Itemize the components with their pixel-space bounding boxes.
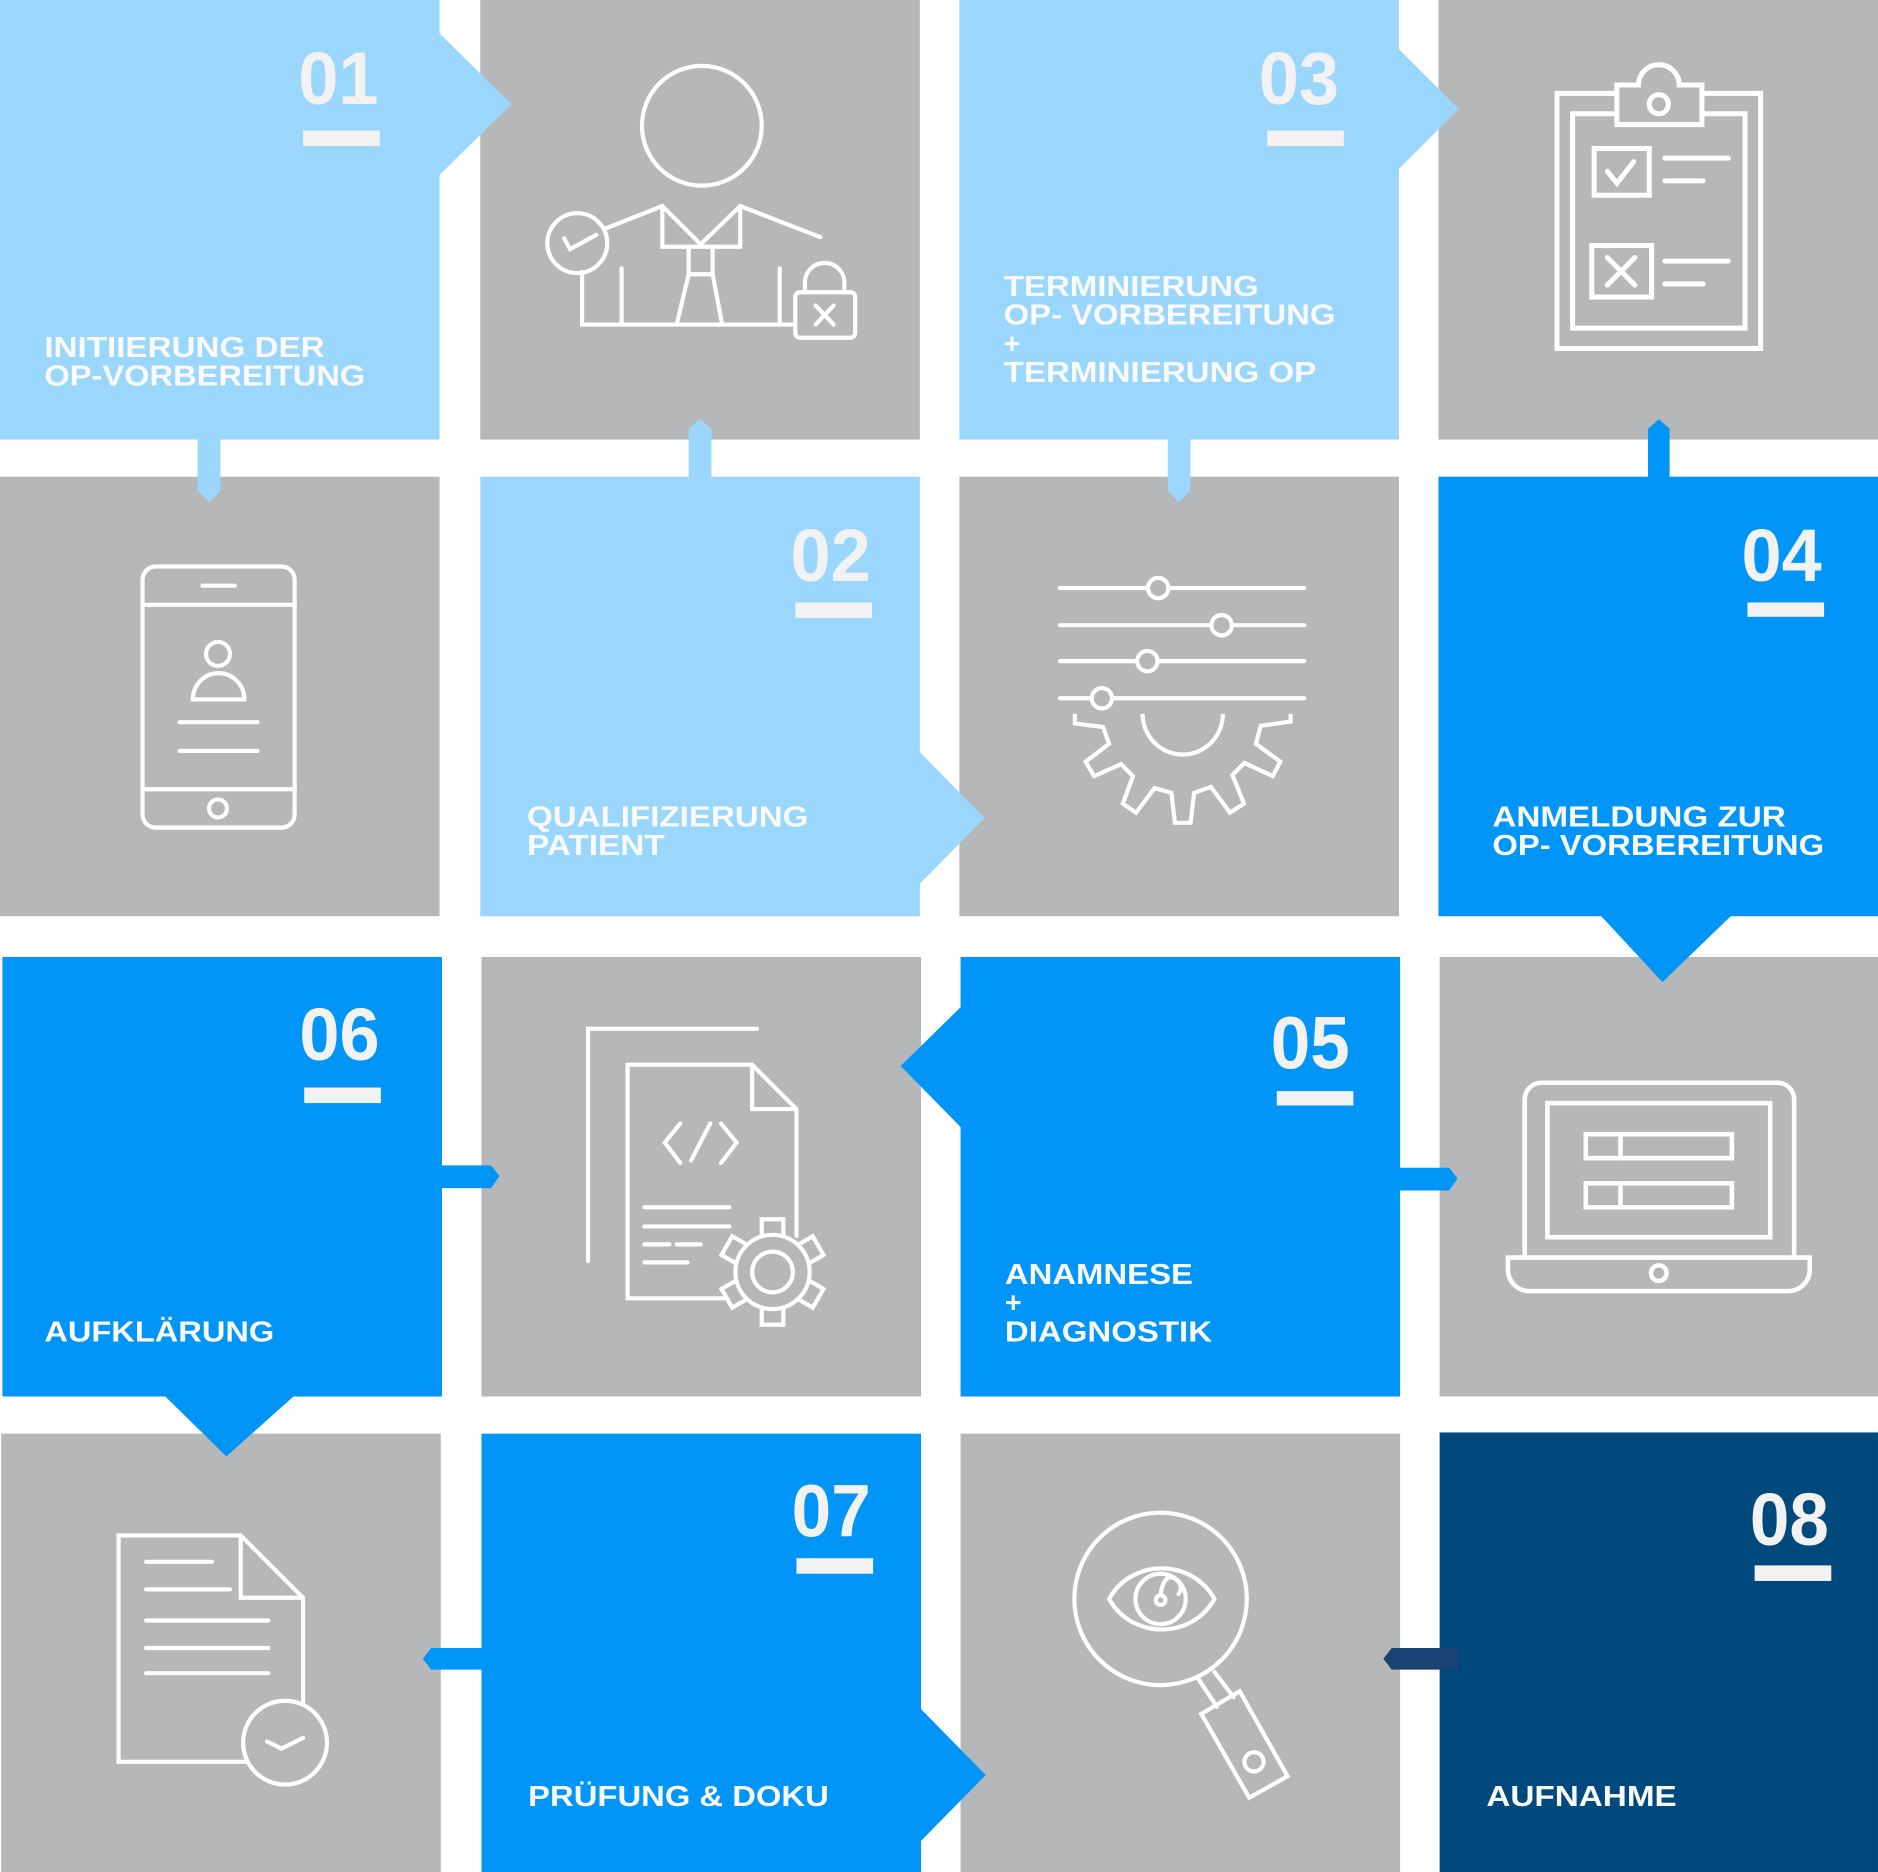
label 03: + xyxy=(1004,328,1020,360)
number 05: 05 xyxy=(1271,1001,1350,1084)
bar 04 xyxy=(1747,602,1824,617)
panel: icon clipboard xyxy=(1438,0,1878,440)
number 03: 03 xyxy=(1259,37,1339,120)
label 07: PRÜFUNG & DOKU xyxy=(528,1780,829,1813)
connector: step 04 up xyxy=(1648,419,1670,478)
panel: icon document with check xyxy=(1,1434,441,1872)
bar 07 xyxy=(796,1558,873,1574)
icon: magnifier with eye xyxy=(1074,1513,1288,1798)
label 03: TERMINIERUNG OP xyxy=(1004,357,1316,389)
label 04: OP- VORBEREITUNG xyxy=(1492,830,1824,862)
panel: icon magnifier with eye xyxy=(961,1434,1400,1872)
number 01: 01 xyxy=(298,37,378,120)
number 02: 02 xyxy=(790,514,871,597)
icon: sliders and gear xyxy=(1060,578,1304,823)
icon: laptop xyxy=(1508,1083,1810,1291)
icon: document with check xyxy=(119,1535,327,1785)
label 04: ANMELDUNG ZUR xyxy=(1492,801,1786,833)
label 01: OP-VORBEREITUNG xyxy=(44,361,365,393)
label 02: QUALIFIZIERUNG xyxy=(527,801,808,833)
icon: smartphone xyxy=(143,567,295,828)
panel: step 07 xyxy=(423,1434,986,1872)
arrow: step 01 to 02 xyxy=(438,32,511,176)
panel: step 03 xyxy=(959,0,1459,502)
arrow: step 07 to 08 xyxy=(920,1708,986,1842)
label 04 xyxy=(1492,801,1824,862)
label 06: AUFKLÄRUNG xyxy=(44,1315,274,1348)
label 02 xyxy=(527,801,808,862)
arrow: step 04 to 05 xyxy=(1600,915,1732,982)
panel: step 05 xyxy=(901,957,1458,1397)
bar 01 xyxy=(303,131,380,146)
panel: step 01 xyxy=(0,0,511,502)
bar 03 xyxy=(1267,131,1344,146)
connector: step 06 right xyxy=(441,1165,499,1188)
connector: step 03 down xyxy=(1168,438,1191,502)
panel: step 02 xyxy=(480,419,985,916)
label 03 xyxy=(1004,271,1335,389)
icon: person xyxy=(547,66,855,338)
panel: step 08 xyxy=(1383,1432,1878,1872)
panel: icon smartphone xyxy=(0,477,440,916)
connector: step 02 up xyxy=(689,419,711,478)
arrow: step 06 to 07 xyxy=(164,1395,295,1456)
label 08: AUFNAHME xyxy=(1486,1781,1677,1813)
connector: step 01 down xyxy=(198,438,220,502)
label 01: INITIIERUNG DER xyxy=(44,332,325,364)
panel: icon laptop xyxy=(1440,957,1878,1397)
label 02: PATIENT xyxy=(527,830,665,862)
label 05: DIAGNOSTIK xyxy=(1005,1316,1212,1348)
bar 05 xyxy=(1277,1091,1353,1105)
number 06: 06 xyxy=(299,993,380,1076)
arrow: step 03 to 04 xyxy=(1398,48,1459,170)
label 03: TERMINIERUNG xyxy=(1004,271,1259,303)
label 03: OP- VORBEREITUNG xyxy=(1004,300,1335,332)
connector: step 08 left xyxy=(1383,1648,1458,1670)
arrow: step 05 to 06 xyxy=(901,1006,962,1128)
number 07: 07 xyxy=(792,1470,871,1553)
panel: step 06 xyxy=(2,957,499,1456)
bar 08 xyxy=(1755,1565,1831,1581)
label 05: + xyxy=(1005,1288,1022,1320)
connector: step 05 right xyxy=(1399,1168,1458,1191)
panel: icon sliders and gear xyxy=(959,477,1399,916)
icon: clipboard xyxy=(1557,65,1761,349)
connector: step 07 left xyxy=(423,1648,483,1670)
panel: icon code document with gear xyxy=(481,957,921,1397)
icon: code document xyxy=(588,1029,824,1325)
number 08: 08 xyxy=(1750,1478,1829,1561)
label 05: ANAMNESE xyxy=(1005,1259,1193,1291)
panel: step 04 xyxy=(1438,419,1878,982)
number 04: 04 xyxy=(1741,514,1822,597)
label 01 xyxy=(44,332,365,393)
panel: icon person with check and lock xyxy=(480,0,920,440)
arrow: step 02 to 03 xyxy=(919,751,985,885)
bar 02 xyxy=(795,602,872,618)
bar 06 xyxy=(304,1088,381,1103)
label 05 xyxy=(1005,1259,1212,1348)
